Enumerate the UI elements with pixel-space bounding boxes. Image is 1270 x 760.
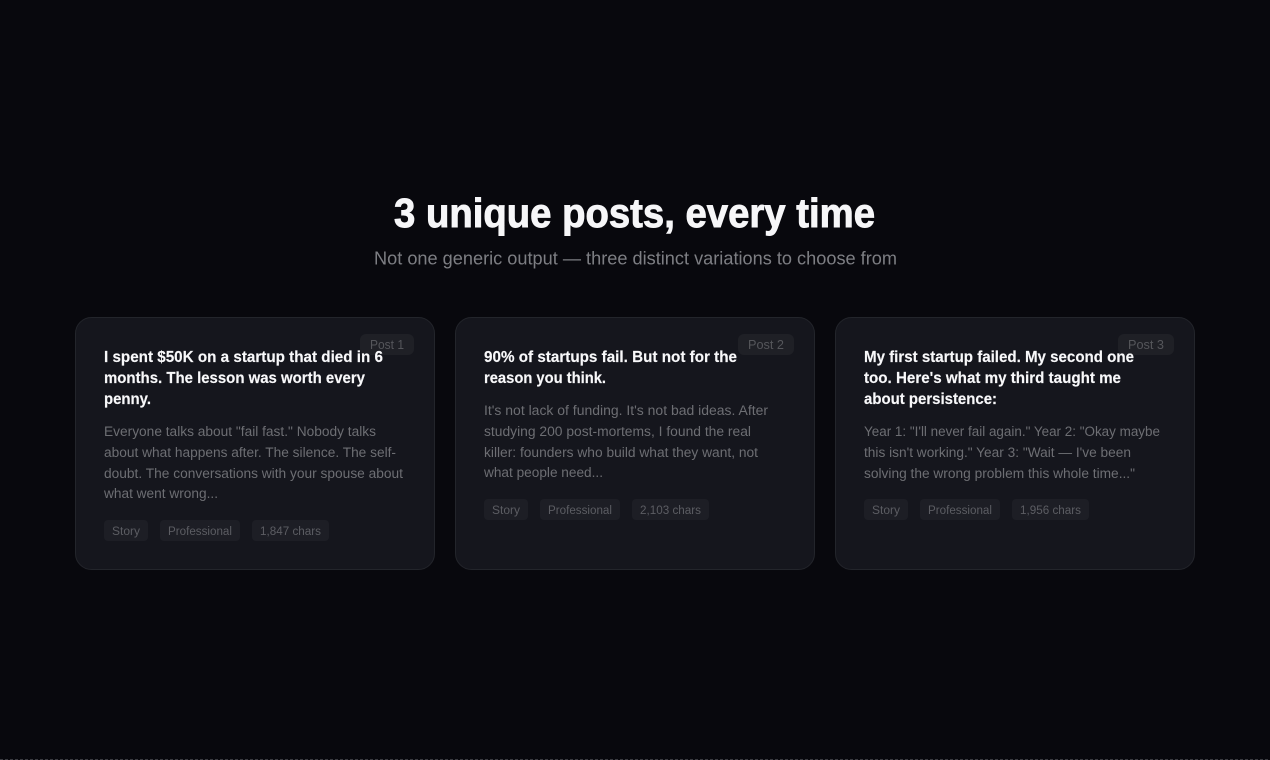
post 3 tags: Professional — [928, 505, 992, 517]
post 3 headline — [864, 349, 1134, 408]
panel: post 2 — [456, 318, 814, 570]
post 3 body — [864, 424, 1160, 481]
post 3 headline: too. Here's what my third taught me — [864, 370, 1121, 387]
post 3 tags: Story — [872, 505, 900, 517]
post 2 body: studying 200 post-mortems, I found the real — [484, 424, 751, 439]
post 1 tags: 1,847 chars — [260, 526, 321, 538]
post 1 body: what went wrong... — [103, 486, 218, 501]
panel: post 1 — [76, 318, 434, 570]
post 3 body: solving the wrong problem this whole time..." — [864, 466, 1135, 481]
badge: post 2 — [738, 334, 794, 355]
post 3 body: Year 1: "I'll never fail again." Year 2: "Okay maybe — [864, 424, 1160, 439]
panel: post 3 — [836, 318, 1194, 570]
post 1 headline: months. The lesson was worth every — [104, 370, 365, 387]
post 2 tags: Professional — [548, 505, 612, 517]
post 1 body: doubt. The conversations with your spouse about — [104, 466, 403, 481]
badge: post 3 — [1118, 334, 1174, 355]
post 1 body: Everyone talks about "fail fast." Nobody talks — [104, 424, 376, 439]
post 1 headline: I spent $50K on a startup that died in 6 — [104, 349, 383, 366]
badge: post 2: Post 2 — [748, 338, 784, 352]
badge: post 3: Post 3 — [1128, 338, 1164, 352]
post 3 body: this isn't working." Year 3: "Wait — I've been — [864, 445, 1131, 460]
post 2 tags: 2,103 chars — [640, 505, 701, 517]
post 1 headline — [104, 349, 383, 408]
post 2 body: what people need... — [483, 465, 603, 480]
post 2 tags: Story — [492, 505, 520, 517]
post 3 headline: about persistence: — [864, 391, 997, 408]
post 1 tags — [104, 520, 329, 541]
post 3 headline: My first startup failed. My second one — [864, 349, 1134, 366]
post 2 headline — [484, 349, 737, 387]
post 2 body: killer: founders who build what they want, not — [484, 445, 758, 460]
post 2 headline: 90% of startups fail. But not for the — [484, 349, 737, 366]
title: 3 unique posts, every time — [394, 190, 875, 236]
badge: post 1: Post 1 — [370, 338, 404, 352]
post 1 tags: Professional — [168, 526, 232, 538]
badge: post 1 — [360, 334, 414, 355]
post 2 headline: reason you think. — [484, 370, 606, 387]
post 2 body: It's not lack of funding. It's not bad ideas. After — [484, 403, 769, 418]
post 1 body: about what happens after. The silence. The self- — [104, 445, 396, 460]
post 1 headline: penny. — [104, 391, 151, 408]
post 3 tags: 1,956 chars — [1020, 505, 1081, 517]
post 1 tags: Story — [112, 526, 140, 538]
post 3 tags — [864, 499, 1089, 520]
post 2 tags — [484, 499, 709, 520]
subtitle: Not one generic output — three distinct variations to choose from — [374, 248, 897, 268]
post 2 body — [483, 403, 769, 480]
post 1 body — [103, 424, 403, 501]
